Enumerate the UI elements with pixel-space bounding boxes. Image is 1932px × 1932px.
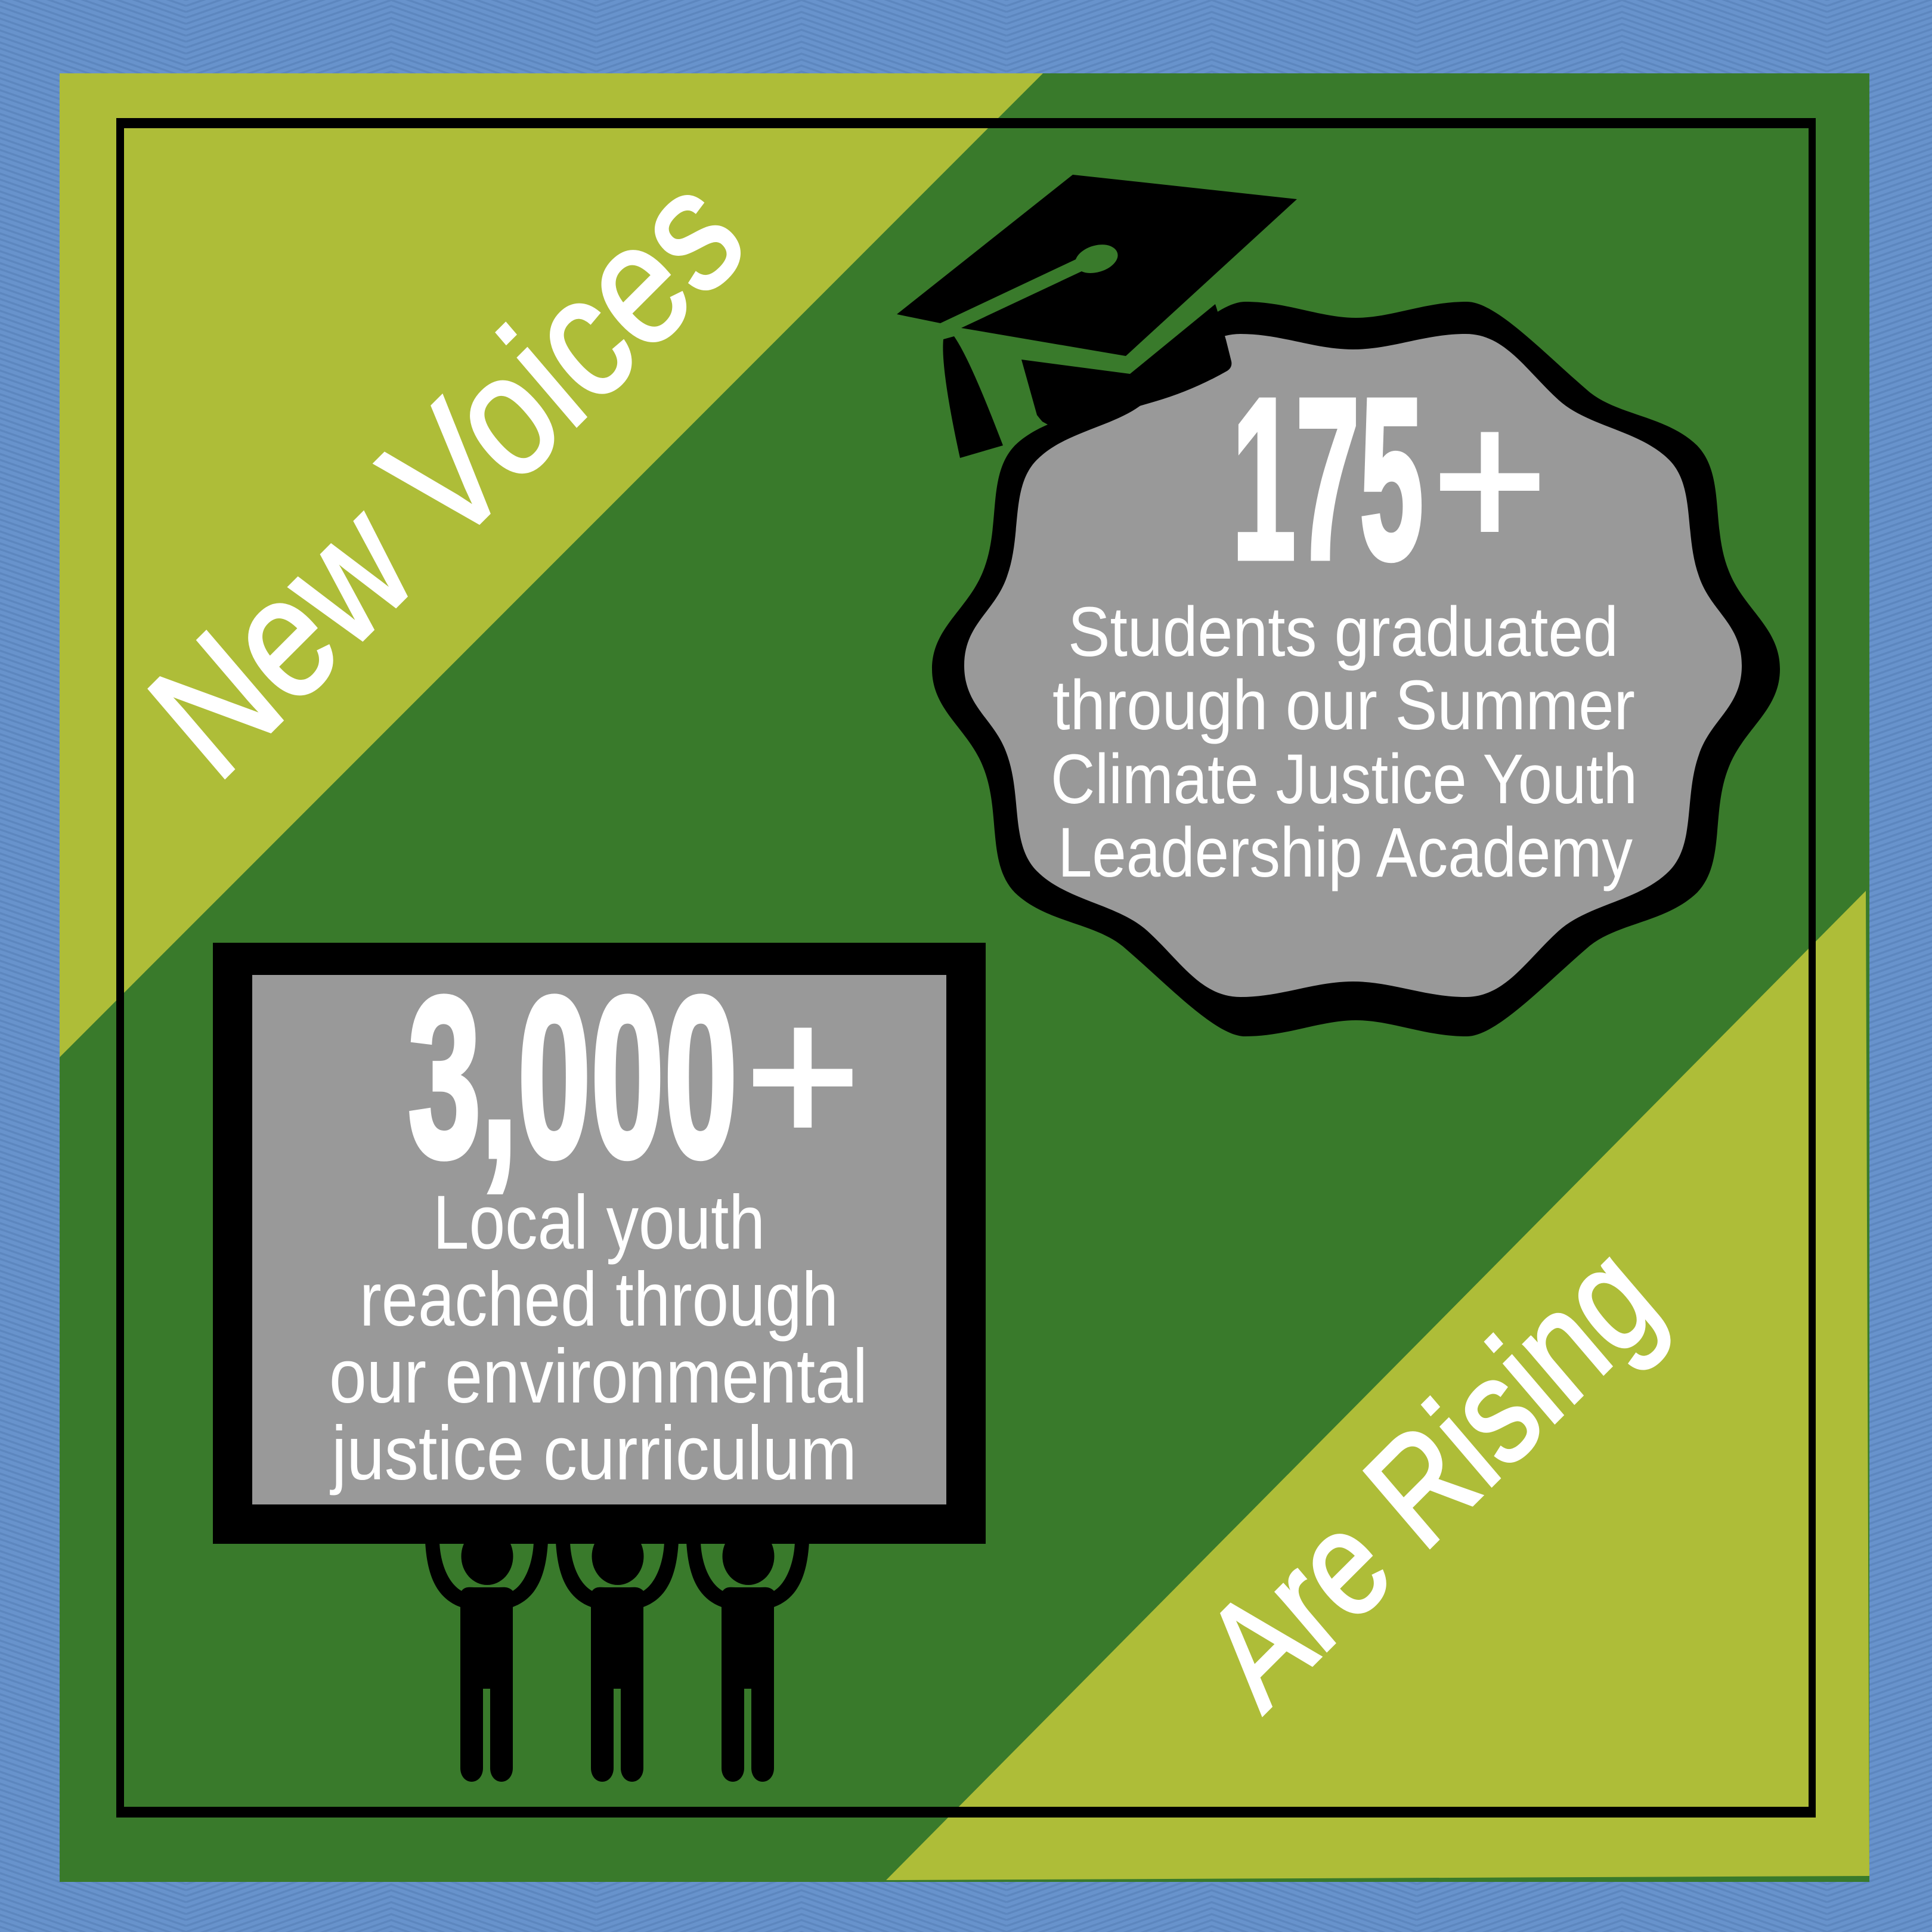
text: sign description: justice curriculum: [329, 1411, 857, 1496]
heading: New Voices: New Voices: [117, 134, 776, 813]
icon: graduation cap: [897, 175, 1297, 458]
stat: 175+: [1232, 351, 1547, 607]
cap board: [897, 175, 1297, 356]
badge outer ring: [932, 302, 1780, 1036]
text: badge description: [1051, 593, 1637, 892]
panel: top-left yellow triangle: [60, 73, 1043, 1057]
stat: 3,000+: +: [745, 965, 860, 1185]
text: badge description: Leadership Academy: [1058, 813, 1633, 892]
badge grey fill: [964, 334, 1742, 997]
stat: 175+: 175: [1232, 351, 1423, 607]
stat: 175+: +: [1432, 369, 1547, 589]
text: sign description: reached through: [360, 1257, 838, 1342]
cap tassel: [943, 336, 1003, 458]
text: badge description: through our Summer: [1052, 666, 1635, 745]
cap base: [1021, 304, 1231, 431]
stat: 3,000+: 3,000: [408, 949, 738, 1205]
text: badge description: Students graduated: [1068, 593, 1618, 671]
person 1: [425, 1528, 548, 1782]
panel: bottom-right yellow triangle: [886, 891, 1869, 1880]
icon: three people holding sign: [425, 1528, 809, 1782]
person 2: [556, 1528, 679, 1782]
text: sign description: our environmental: [329, 1334, 868, 1419]
panel: sign board: [213, 943, 986, 1544]
black frame: [116, 118, 1816, 1818]
person 3: [686, 1528, 809, 1782]
text: sign description: Local youth: [433, 1180, 765, 1265]
text: badge description: Climate Justice Youth: [1051, 740, 1637, 819]
badge: scalloped stat panel: [932, 302, 1780, 1036]
text: sign description: [329, 1180, 868, 1496]
heading: Are Rising: Are Rising: [1176, 1211, 1686, 1739]
